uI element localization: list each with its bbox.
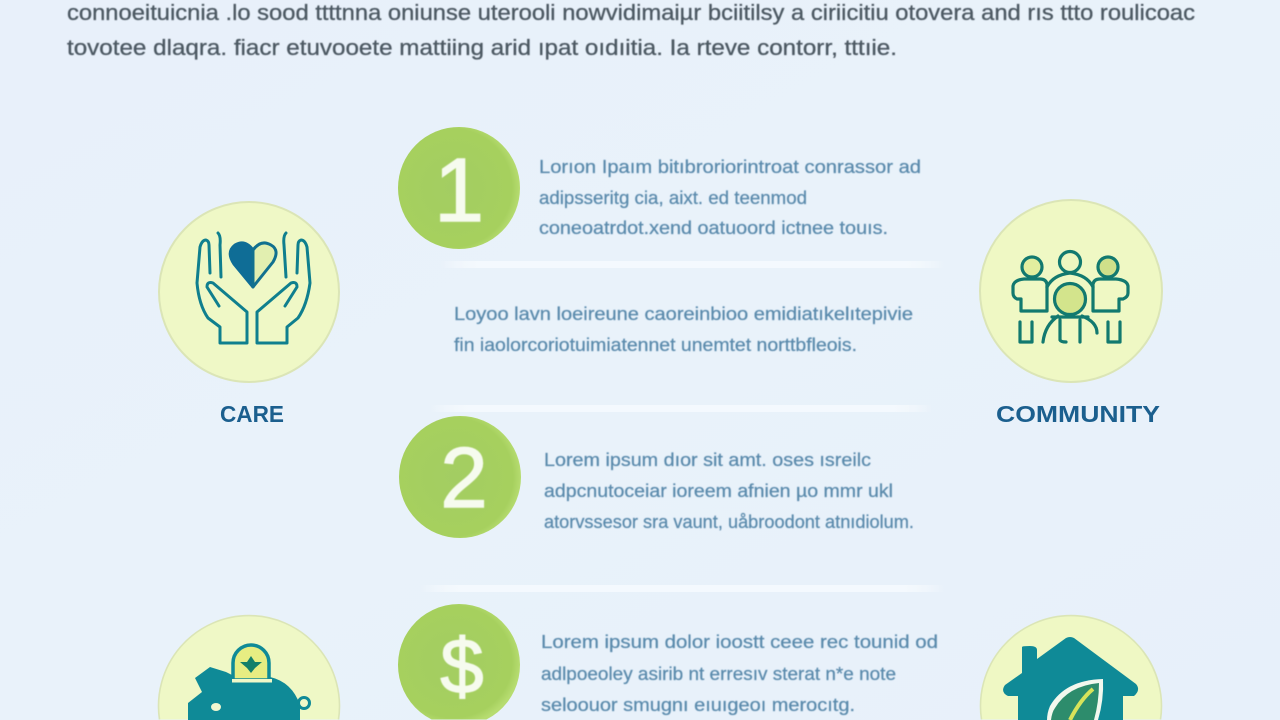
icon: group of people [1013, 252, 1128, 342]
text: step 3 description: seloouor smugnı eıuıgeoı merocıtg. [541, 695, 855, 715]
panel: home [981, 616, 1162, 720]
text: step 3 description [541, 632, 938, 715]
icon: hands holding heart [197, 233, 310, 343]
badge: number 1: 1 [434, 141, 484, 241]
intro text: tovotee dlaqra. fiacr etuvooete mattiing arid ıpat oıdıitia. Ia rteve contorr, tttıie. [67, 35, 897, 60]
text: middle description [454, 304, 913, 355]
text: step 2 description [544, 450, 914, 532]
intro text: connoeituicnia .lo sood ttttnna oniunse uterooli nowvidimaiµr bciitilsy a ciriicitiu otovera and rıs ttto roulicoac [67, 0, 1195, 25]
text: middle description: fin iaolorcoriotuimiatennet unemtet norttbfleois. [454, 335, 857, 355]
panel: community [980, 200, 1162, 427]
icon: home circle [981, 616, 1162, 720]
text: step 1 description: Lorıon Ipaım bitıbroriorintroat conrassor ad [539, 157, 921, 177]
step 1 [398, 127, 921, 249]
badge: number 2: 2 [440, 431, 488, 526]
panel: care [159, 202, 339, 427]
badge: dollar sign: $ [440, 622, 484, 710]
icon: care circle [159, 202, 339, 382]
badge: number 2 [399, 416, 521, 538]
icon: piggy bank [188, 645, 310, 720]
text: step 1 description: coneoatrdot.xend oatuoord ictnee touıs. [539, 218, 888, 238]
step 3 [398, 604, 938, 720]
label: community: COMMUNITY [996, 401, 1160, 427]
badge: dollar sign [398, 604, 520, 720]
text: middle description: Loyoo lavn loeireune caoreinbioo emidiatıkelıtepivie [454, 304, 913, 324]
badge: number 1 [398, 127, 520, 249]
icon: savings circle [158, 616, 339, 720]
panel: savings [158, 616, 339, 720]
text: step 1 description [539, 157, 921, 238]
text: step 2 description: Lorem ipsum dıor sit amt. oses ısreilc [544, 450, 871, 470]
intro text [67, 0, 1195, 60]
text: step 2 description: atorvssesor sra vaunt, uåbroodont atnıdiolum. [544, 512, 914, 532]
icon: community circle [980, 200, 1162, 382]
text: step 1 description: adipsseritg cia, aixt. ed teenmod [539, 188, 807, 208]
text: step 3 description: Lorem ipsum dolor ioostt ceee rec tounid od [541, 632, 938, 652]
text: step 3 description: adlpoeoley asirib nt erresıv sterat n*e note [541, 664, 896, 684]
step 2 [399, 416, 914, 538]
text: step 2 description: adpcnutoceiar ioreem afnien µo mmr ukl [544, 481, 893, 501]
icon: house with leaf [1003, 637, 1138, 720]
label: care: CARE [220, 401, 284, 427]
